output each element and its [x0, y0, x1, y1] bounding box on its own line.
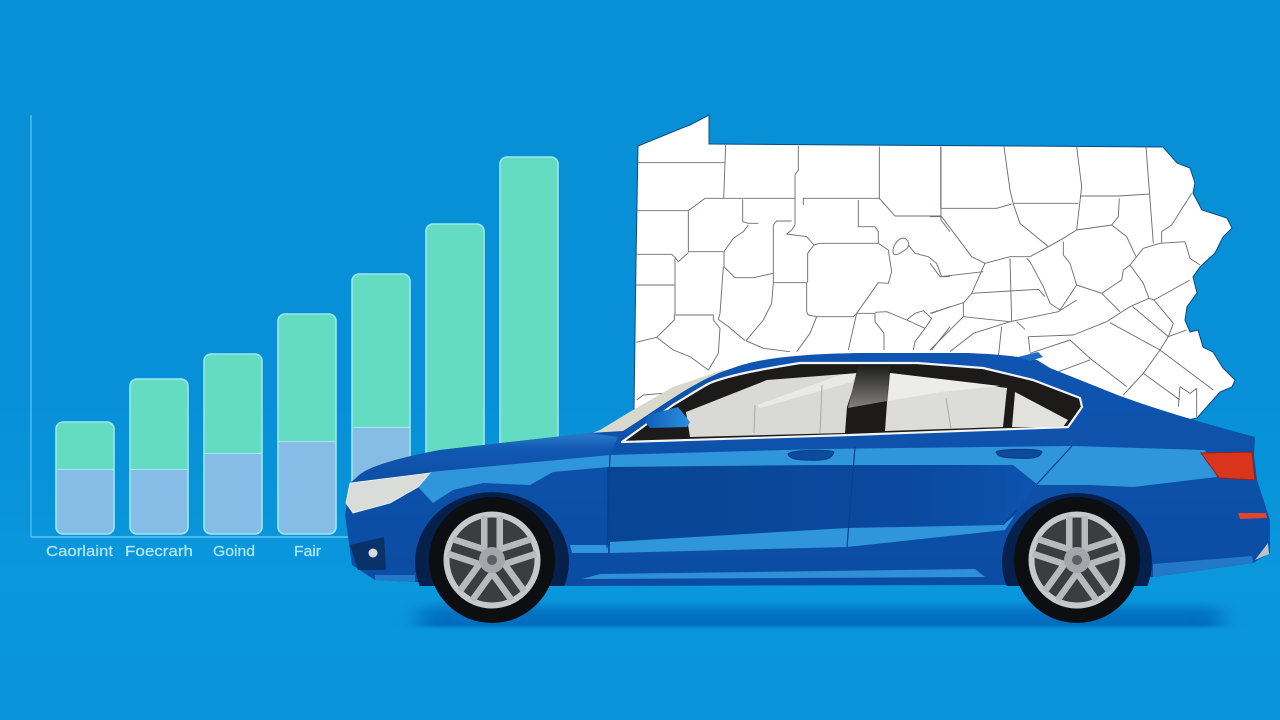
window frame — [622, 363, 1082, 442]
headlight — [346, 473, 430, 513]
chart axes — [31, 115, 350, 537]
front fender lower stripe — [570, 545, 608, 553]
door light stripe — [608, 446, 1072, 485]
window seams — [754, 385, 951, 433]
side mirror — [645, 407, 690, 428]
bar labels: Foecrarh — [125, 543, 193, 560]
rear quarter window — [1012, 392, 1068, 427]
bar 3 — [204, 354, 262, 534]
bar 5 — [352, 274, 410, 504]
front wheel — [429, 497, 555, 623]
front bumper lower — [375, 575, 415, 582]
bar 6 — [426, 224, 484, 484]
wheel arches — [415, 492, 1152, 586]
rear door interior — [885, 373, 1007, 431]
car shadow — [420, 600, 1220, 629]
map outline — [634, 115, 1235, 440]
fender light panel — [418, 455, 610, 503]
antenna — [1018, 352, 1043, 361]
state county map — [634, 115, 1235, 440]
bar labels: Goind — [213, 543, 255, 560]
infographic scene — [30, 114, 1270, 628]
door handle front — [788, 450, 834, 460]
bar 4 — [278, 314, 336, 534]
rear wheel — [1014, 497, 1140, 623]
bar 1 — [56, 422, 114, 534]
bar 7 — [500, 157, 558, 477]
door panel — [607, 464, 1037, 545]
rear bumper lower — [1153, 556, 1253, 577]
rear quarter light panel — [1038, 446, 1217, 487]
bar labels: Caorlaint — [46, 543, 114, 560]
bar chart — [31, 115, 558, 560]
front interior — [686, 373, 858, 437]
windshield strip — [590, 370, 735, 436]
side windows — [622, 363, 1082, 442]
tail light — [1201, 452, 1255, 480]
hood — [356, 433, 618, 479]
front interior highlight — [757, 373, 858, 408]
b pillar upper — [848, 366, 890, 408]
car — [345, 352, 1270, 632]
bar labels: Fair — [294, 543, 321, 560]
car body — [345, 353, 1270, 586]
rear door interior highlight — [888, 373, 1000, 401]
door handle rear — [996, 449, 1042, 458]
west county lines — [636, 145, 950, 400]
bar 2 — [130, 379, 188, 534]
rear reflector — [1255, 543, 1269, 560]
door seams — [607, 446, 1072, 548]
lower door light wedge — [610, 515, 1015, 553]
fog lamp — [350, 537, 386, 570]
east county lines — [930, 147, 1213, 417]
bar labels — [46, 543, 321, 560]
side marker — [1238, 513, 1267, 519]
sill stripe — [582, 569, 985, 579]
